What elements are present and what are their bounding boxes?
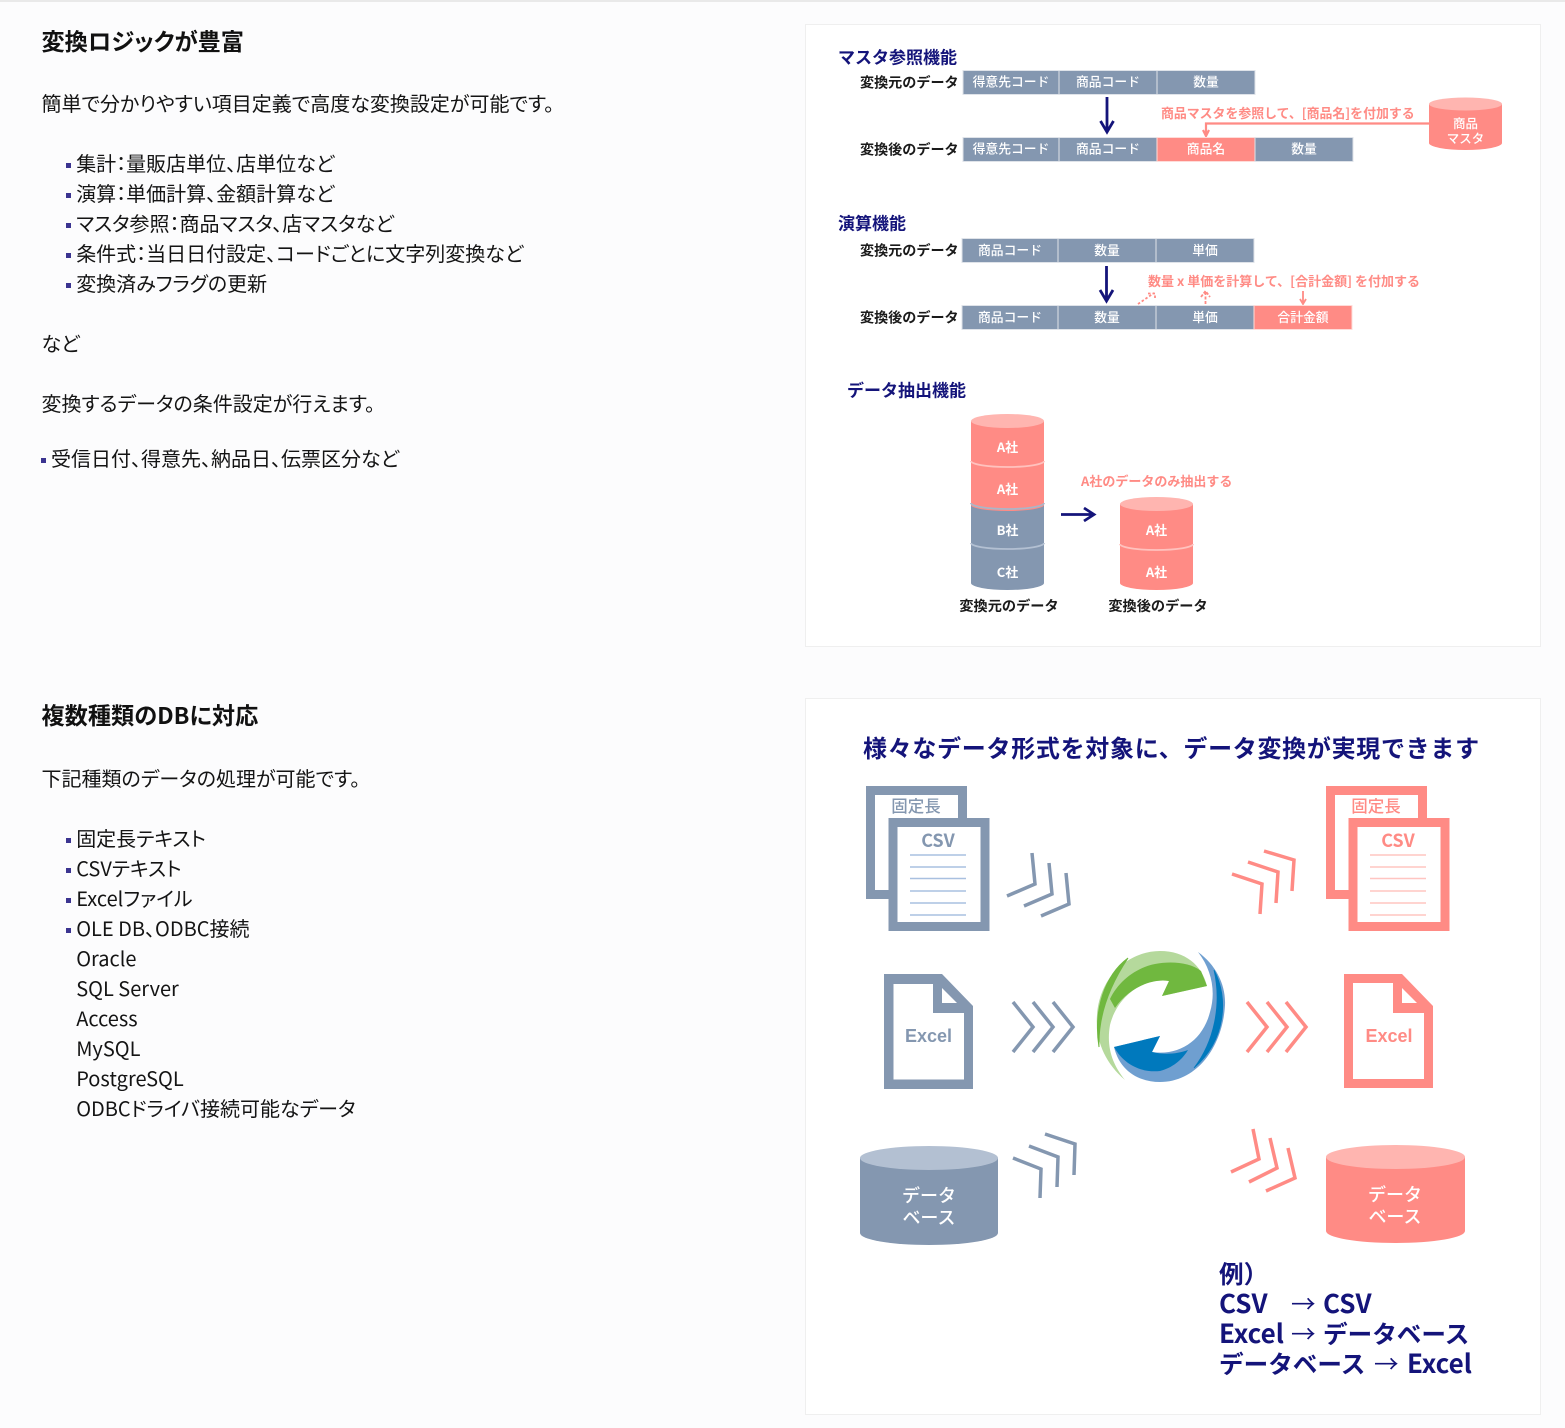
heading: data extraction: データ抽出機能 [847, 376, 966, 402]
table row: result fields: 商品名 [1187, 138, 1225, 158]
icon: source database [860, 1146, 998, 1245]
arrow: total reference [1300, 291, 1306, 304]
headline: data formats: 様々なデータ形式を対象に、データ変換が実現できます [863, 729, 1480, 764]
row label: source data: 変換元のデータ [860, 240, 959, 260]
table row: result fields: 商品コード [1076, 138, 1140, 158]
text: etc: など [42, 328, 80, 357]
row label: result data: 変換後のデータ [860, 140, 959, 160]
bullet list: data sources: 固定長テキスト [76, 823, 206, 852]
text: conversion examples: データベース [1323, 1315, 1469, 1351]
bullet list: data sources: Excelファイル [76, 883, 193, 912]
text: conversion examples: Excel [1407, 1344, 1472, 1381]
cylinder stack: extracted data: A社 [1145, 562, 1167, 581]
table row: result fields: 数量 [1094, 307, 1120, 326]
table row: result fields: 商品コード [978, 307, 1042, 326]
cylinder stack: extracted data: A社 [1145, 520, 1167, 539]
bullet list: data sources: Oracle [76, 943, 136, 972]
table row: source fields: 商品コード [978, 240, 1042, 259]
bullet list: logic features: マスタ参照：商品マスタ、店マスタなど [76, 208, 394, 237]
text: conversion examples: 例） [1219, 1255, 1268, 1291]
table row: result fields [963, 138, 1353, 162]
cylinder stack: source data: A社 [996, 437, 1018, 456]
diagram: master lookup [838, 44, 1502, 162]
icon: target database: データ [1368, 1181, 1422, 1207]
arrow: extraction [1061, 508, 1094, 521]
diagram: data extraction [847, 376, 1232, 616]
cylinder: product master: 商品 [1453, 113, 1478, 132]
bullet list: logic features: 集計：量販店単位、店単位など [76, 148, 334, 177]
table row: source fields: 数量 [1094, 240, 1120, 259]
cylinder stack: source data: C社 [997, 562, 1018, 581]
arrow: quantity reference [1138, 293, 1155, 304]
cylinder: product master [1429, 98, 1502, 150]
table row: source fields: 数量 [1193, 72, 1219, 90]
icon: source Excel file [884, 974, 973, 1089]
heading: database support: 複数種類のDBに対応 [42, 697, 258, 731]
green arrow [1097, 951, 1207, 1080]
bullet list: data sources [66, 823, 356, 1122]
table row: result fields: 得意先コード [973, 138, 1049, 158]
heading: conversion logic: 変換ロジックが豊富 [42, 22, 244, 56]
bullet list: logic features [66, 148, 524, 297]
icon: sync arrows [1097, 951, 1225, 1082]
bullet list: data sources: ODBCドライバ接続可能なデータ [76, 1093, 356, 1122]
table row: result fields: 単価 [1192, 307, 1218, 326]
cylinder stack: source data [971, 414, 1044, 590]
bullet list: data sources: SQL Server [76, 973, 179, 1002]
row label: source data: 変換元のデータ [860, 72, 959, 92]
text: conversion examples: → [1291, 1315, 1316, 1351]
table row: source fields [962, 238, 1254, 262]
bullet list: data sources: OLE DB、ODBC接続 [76, 913, 250, 942]
icon: source database: ベース [902, 1204, 956, 1230]
bullet list: data sources: Access [76, 1003, 138, 1032]
icon: target Excel file [1344, 974, 1433, 1088]
bullet list: logic features: 条件式：当日日付設定、コードごとに文字列変換など [76, 238, 523, 267]
callout: master lookup note: 商品マスタを参照して、[商品名]を付加する [1161, 103, 1415, 122]
cylinder: product master: マスタ [1447, 128, 1484, 147]
arrow: source CSV chevrons [1007, 853, 1069, 916]
icon: target database [1326, 1145, 1465, 1243]
row label: result data: 変換後のデータ [860, 308, 959, 328]
arrow: target database chevrons [1231, 1129, 1295, 1191]
section: database support text [42, 697, 360, 1122]
bullet list: data sources: CSVテキスト [76, 853, 182, 882]
icon: target Excel file: Excel [1365, 1026, 1413, 1046]
intro text: 下記種類のデータの処理が可能です。 [42, 763, 360, 792]
table row: result fields [962, 306, 1352, 330]
icon: target fixed length and CSV documents: CSV [1381, 827, 1416, 853]
callout: extraction note: A社のデータのみ抽出する [1080, 471, 1232, 490]
bullet list: data sources: MySQL [76, 1033, 140, 1062]
icon: target fixed length and CSV documents: 固定長 [1351, 793, 1401, 817]
table row: source fields: 商品コード [1076, 72, 1140, 90]
arrow: master to field [1203, 124, 1430, 136]
arrow: source database chevrons [1013, 1134, 1075, 1198]
text: conversion examples: CSV [1323, 1284, 1372, 1321]
icon: target database: ベース [1368, 1203, 1422, 1229]
intro text: 簡単で分かりやすい項目定義で高度な変換設定が可能です。 [42, 88, 554, 117]
table row: source fields [963, 70, 1255, 94]
text: conversion examples: Excel [1219, 1314, 1284, 1351]
cylinder stack: source data: B社 [997, 520, 1018, 539]
section: conversion logic text [41, 22, 554, 472]
icon: source fixed length and CSV documents [870, 790, 985, 926]
heading: master lookup: マスタ参照機能 [838, 44, 957, 68]
bullet list: data sources: PostgreSQL [76, 1063, 184, 1092]
bullet: condition examples: 受信日付、得意先、納品日、伝票区分など [51, 443, 399, 472]
blue arrow [1114, 952, 1225, 1082]
arrow: source to result [1100, 97, 1114, 132]
icon: source database: データ [902, 1182, 956, 1208]
table row: source fields: 単価 [1192, 240, 1218, 259]
text: conversion examples: データベース [1219, 1345, 1365, 1381]
arrow: source to result [1100, 266, 1113, 301]
text: conversion examples: CSV [1219, 1284, 1268, 1321]
label: source data: 変換元のデータ [959, 596, 1059, 616]
icon: source fixed length and CSV documents: CSV [921, 827, 956, 853]
text: conversion examples: → [1291, 1285, 1316, 1321]
arrow: target CSV chevrons [1232, 851, 1294, 914]
callout: calculation note: 数量 x 単価を計算して、[合計金額] を付加する [1148, 271, 1420, 290]
icon: source fixed length and CSV documents: 固定長 [891, 793, 941, 817]
arrow: unit price reference [1201, 291, 1210, 304]
text: condition settings: 変換するデータの条件設定が行えます。 [42, 388, 375, 417]
text: conversion examples: → [1374, 1345, 1399, 1381]
icon: source Excel file: Excel [905, 1026, 952, 1046]
heading: calculation: 演算機能 [838, 210, 906, 234]
panel: conversion diagrams background [805, 24, 1540, 647]
arrow: source Excel chevrons [1013, 1002, 1073, 1052]
bullet list: logic features: 演算：単価計算、金額計算など [76, 178, 334, 207]
table row: result fields: 数量 [1291, 138, 1317, 158]
label: result data: 変換後のデータ [1108, 596, 1208, 616]
table row: result fields: 合計金額 [1277, 307, 1329, 326]
cylinder stack: extracted data [1120, 497, 1193, 590]
icon: target fixed length and CSV documents [1330, 790, 1445, 926]
table row: source fields: 得意先コード [973, 72, 1049, 90]
text: conversion examples [1219, 1255, 1472, 1381]
diagram: calculation [838, 210, 1420, 330]
panel: data formats background [805, 698, 1540, 1415]
bullet list: logic features: 変換済みフラグの更新 [76, 268, 267, 297]
arrow: target Excel chevrons [1247, 1002, 1306, 1052]
cylinder stack: source data: A社 [996, 479, 1018, 498]
